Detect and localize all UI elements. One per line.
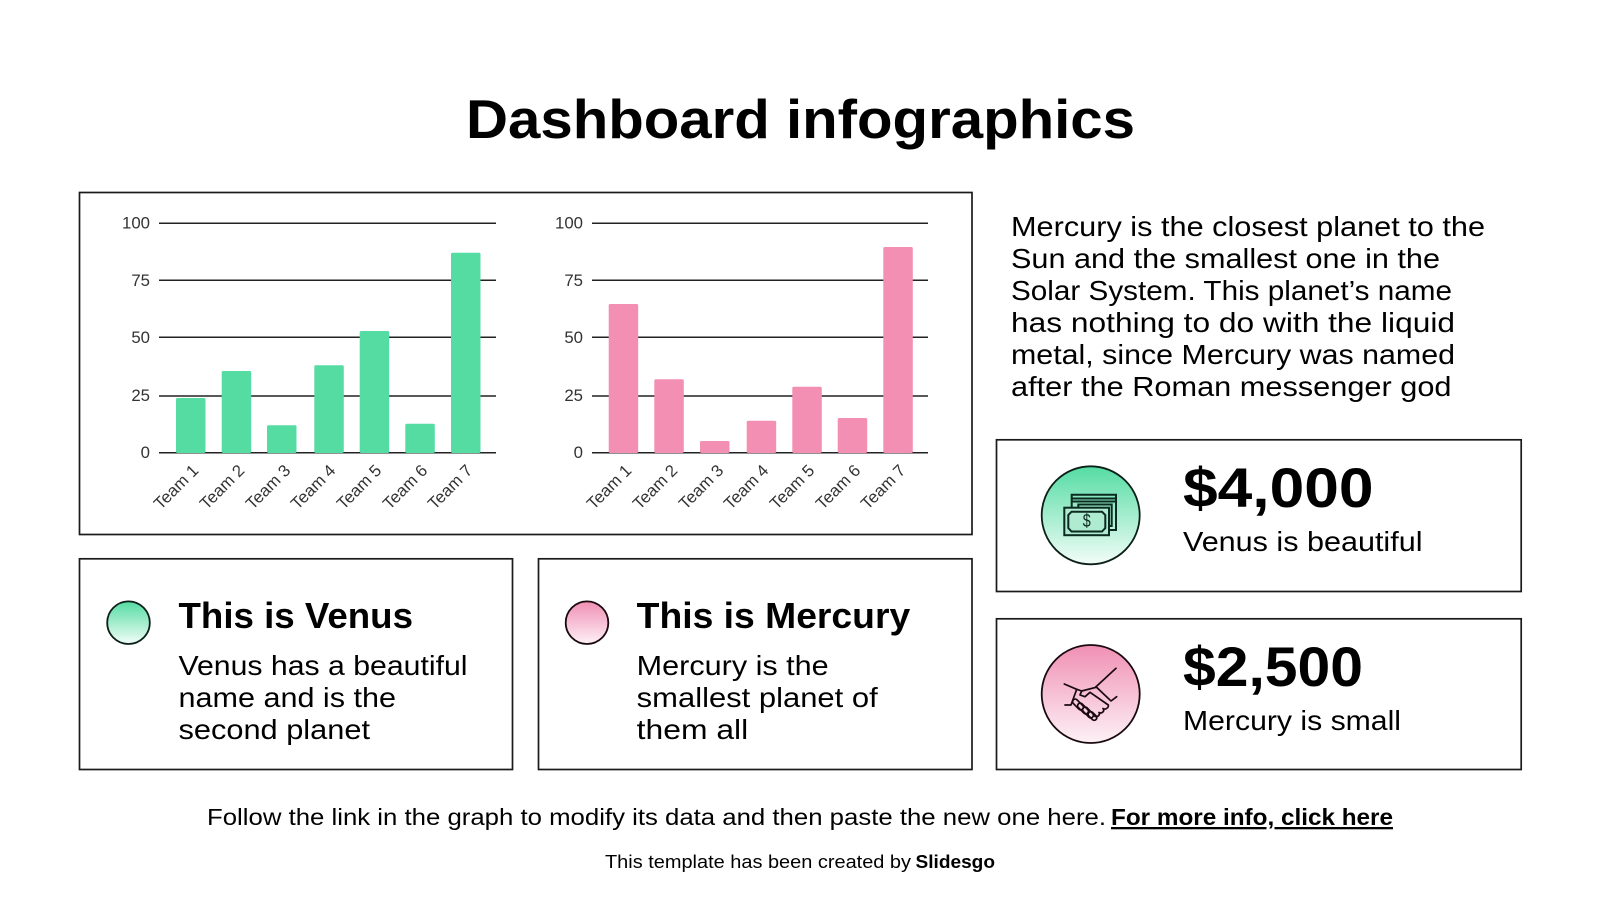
footer note: For more info, click here: [1111, 804, 1393, 830]
body text: [637, 650, 878, 745]
heading: This is Mercury: [637, 595, 910, 636]
title: Dashboard infographics: [466, 88, 1135, 150]
bar chart: Mercury teams: Team 6: [812, 461, 864, 513]
credit: Slidesgo: [916, 851, 995, 872]
panel: This is Mercury: [538, 559, 972, 770]
body text: them all: [637, 714, 748, 745]
bar chart: Mercury teams: Team 3: [675, 461, 727, 513]
icon: money: $: [1083, 511, 1091, 531]
body text: second planet: [178, 714, 370, 745]
heading: This is Venus: [178, 595, 413, 636]
panel: This is Venus: [80, 559, 512, 770]
bar chart: Mercury teams: 50: [564, 328, 583, 347]
footer note: [207, 804, 1393, 830]
bar chart: Mercury teams: 75: [564, 271, 583, 290]
bar chart: Venus teams: [122, 214, 496, 513]
text block: Mercury description: [1011, 211, 1485, 402]
bar chart: Venus teams: 0: [141, 443, 150, 462]
text block: Mercury description: Sun and the smallest one in the: [1011, 243, 1440, 274]
bar chart: Mercury teams: Team 5: [766, 461, 818, 513]
bar chart: Venus teams: Team 2: [196, 461, 248, 513]
label: Venus is beautiful: [1183, 526, 1422, 557]
value: $4,000: [1183, 456, 1374, 519]
bar chart: Mercury teams: 100: [555, 214, 583, 232]
bar chart: Mercury teams: Team 7: [857, 461, 909, 513]
body text: [178, 650, 468, 745]
bar chart: Mercury teams: 25: [564, 386, 583, 405]
label: Mercury is small: [1183, 705, 1401, 736]
credit: This template has been created by: [605, 851, 912, 872]
text block: Mercury description: Mercury is the closest planet to the: [1011, 211, 1485, 242]
bar chart: Mercury teams: Team 1: [583, 461, 635, 513]
value: $2,500: [1183, 635, 1363, 698]
icon: pink dot: [566, 601, 608, 644]
bar chart: Venus teams: 50: [131, 328, 150, 347]
bar chart: Venus teams: Team 6: [379, 461, 431, 513]
text block: Mercury description: has nothing to do with the liquid: [1011, 307, 1455, 338]
icon: handshake: [1042, 645, 1140, 743]
panel: Mercury stat: [996, 619, 1521, 770]
bar chart: Venus teams: 75: [131, 271, 150, 290]
text block: Mercury description: Solar System. This planet’s name: [1011, 275, 1452, 306]
bar chart: Mercury teams: [555, 214, 928, 513]
bar chart: Mercury teams: 0: [574, 443, 583, 462]
text block: Mercury description: metal, since Mercury was named: [1011, 339, 1455, 370]
bar chart: Venus teams: Team 3: [242, 461, 294, 513]
panel: charts: [80, 192, 972, 534]
bar chart: Venus teams: Team 1: [150, 461, 202, 513]
bar chart: Venus teams: Team 4: [287, 461, 339, 513]
bar chart: Venus teams: Team 7: [424, 461, 476, 513]
bar chart: Mercury teams: Team 2: [629, 461, 681, 513]
icon: money: [1042, 466, 1140, 564]
bar chart: Venus teams: 100: [122, 214, 150, 232]
bar chart: Mercury teams: Team 4: [720, 461, 772, 513]
footer note: Follow the link in the graph to modify its data and then paste the new one here.: [207, 804, 1106, 830]
icon: green dot: [107, 601, 150, 644]
body text: name and is the: [178, 682, 396, 713]
body text: Mercury is the: [637, 650, 829, 681]
bar chart: Venus teams: 25: [131, 386, 150, 405]
panel: Venus stat: [996, 440, 1521, 592]
text block: Mercury description: after the Roman messenger god: [1011, 371, 1452, 402]
bar chart: Venus teams: Team 5: [333, 461, 385, 513]
body text: Venus has a beautiful: [178, 650, 468, 681]
body text: smallest planet of: [637, 682, 878, 713]
